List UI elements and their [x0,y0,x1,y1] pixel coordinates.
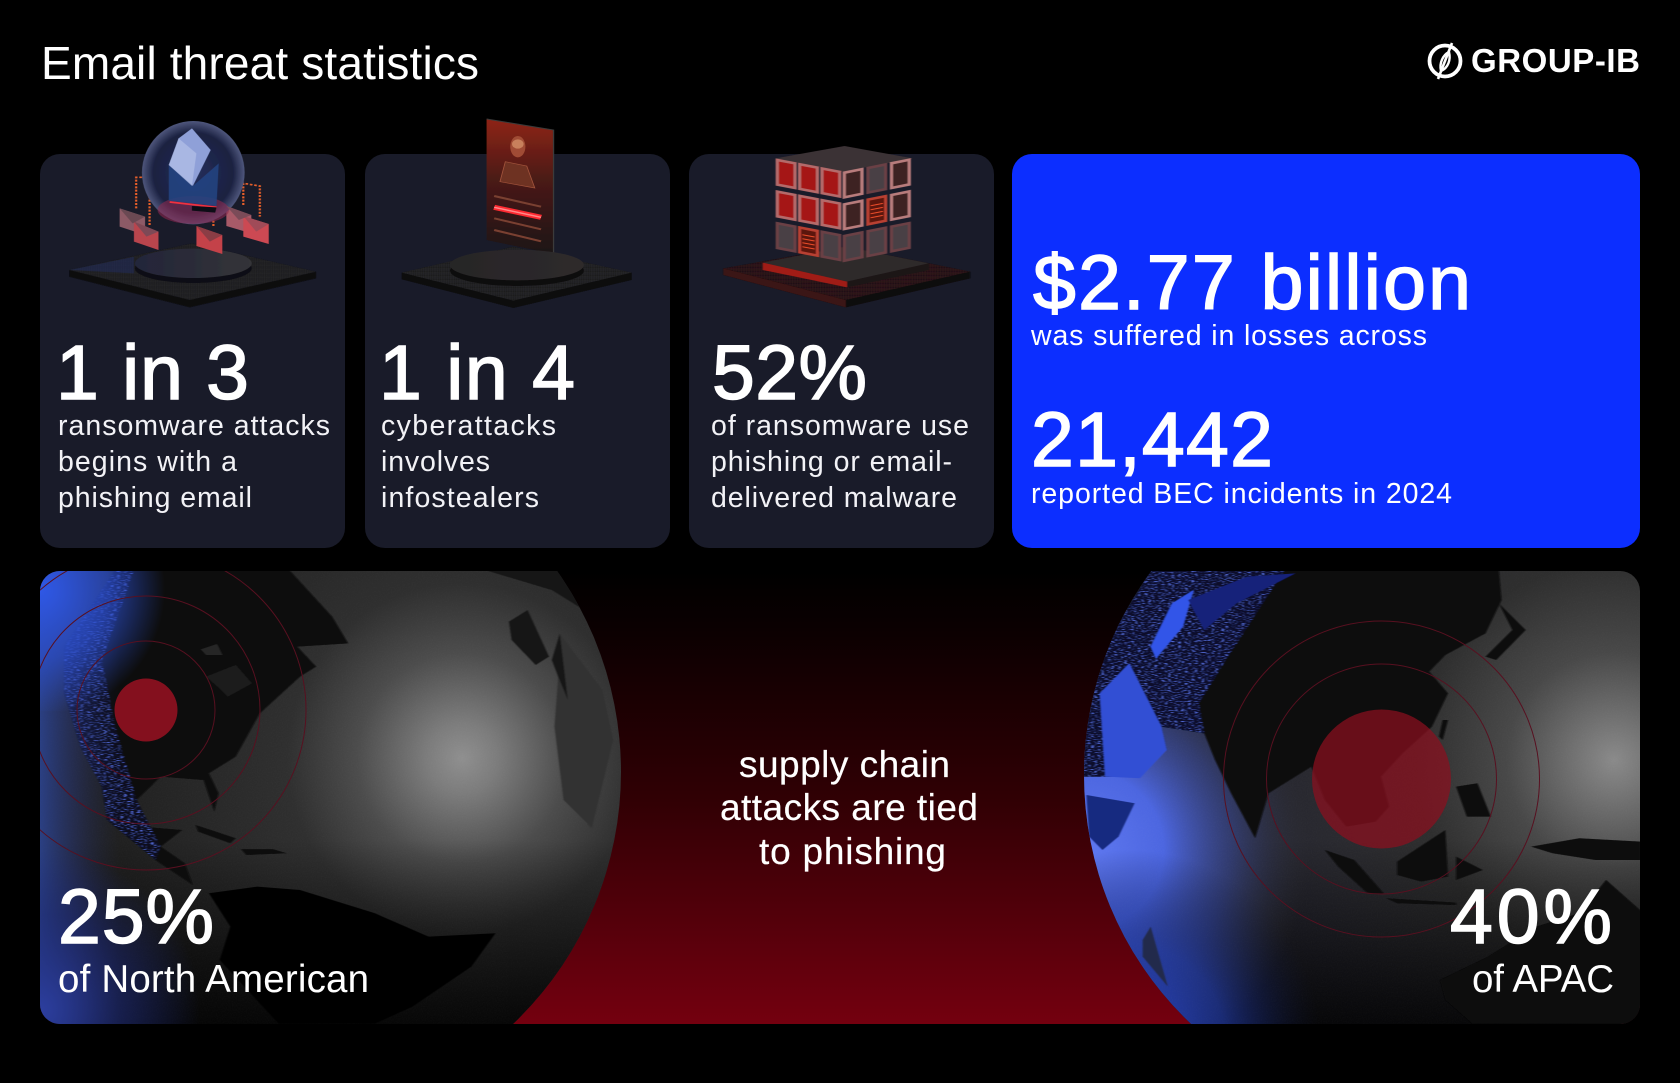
title: Email threat statistics [41,37,479,89]
callout: supply chain attacks are tied to phishing: attacks are tied [720,787,978,828]
stat: 40%: 40% [1450,874,1612,960]
description: ransomware use phishing: phishing or email- [711,446,952,478]
panel: supply chain attacks [40,571,1640,1024]
blue edge light [40,571,108,1024]
marker: APAC target [1224,621,1540,937]
callout: supply chain attacks are tied to phishing: supply chain [739,744,950,785]
stat: $2.77 billion: $2.77 billion [1033,240,1471,326]
stat: 21,442: 21,442 [1031,397,1273,483]
description: ransomware attacks [58,410,330,514]
globe: Asia-Pacific [1084,571,1640,1024]
panel: infostealers card [365,119,670,548]
land masses [1081,570,1644,1024]
description: BEC incidents: reported BEC incidents in 2024 [1031,478,1452,510]
stat: 1 in 4: 1 in 4 [379,330,575,416]
stat: 52%: 52% [712,330,867,416]
description: infostealers: involves [381,446,490,478]
illustration: glass orb with envelopes [69,121,316,307]
land masses [64,570,613,1024]
panel: email-delivered malware card [689,146,994,548]
marker: North America target [40,571,306,870]
description: ransomware use phishing [711,410,969,514]
stat: 1 in 3: 1 in 3 [56,330,249,416]
description: infostealers [381,410,556,514]
description: ransomware attacks: begins with a [58,446,237,478]
logo wordmark: GROUP-IB [1471,42,1640,79]
label: of APAC: of APAC [1472,958,1614,1001]
description: ransomware attacks: ransomware attacks [58,410,330,442]
description: infostealers: cyberattacks [381,410,556,442]
description: ransomware attacks: phishing email [58,482,252,514]
description: ransomware use phishing: of ransomware use [711,410,969,442]
callout: supply chain attacks are tied to phishing: to phishing [759,831,946,872]
logo: Group-IB [1430,42,1640,79]
icon: logo mark [1430,43,1460,79]
description: losses: was suffered in losses across [1030,320,1427,352]
stat: 25%: 25% [58,874,214,960]
label: of North American: of North American [58,958,369,1001]
panel: ransomware phishing card [40,121,345,548]
description: ransomware use phishing: delivered malware [711,482,957,514]
illustration: ID card on platform [402,119,632,308]
description: infostealers: infostealers [381,482,539,514]
panel: BEC losses [1012,154,1640,548]
illustration: red data cube [723,146,970,307]
globe: North America [40,571,621,1024]
callout: supply chain attacks are tied to phishing [720,744,978,872]
